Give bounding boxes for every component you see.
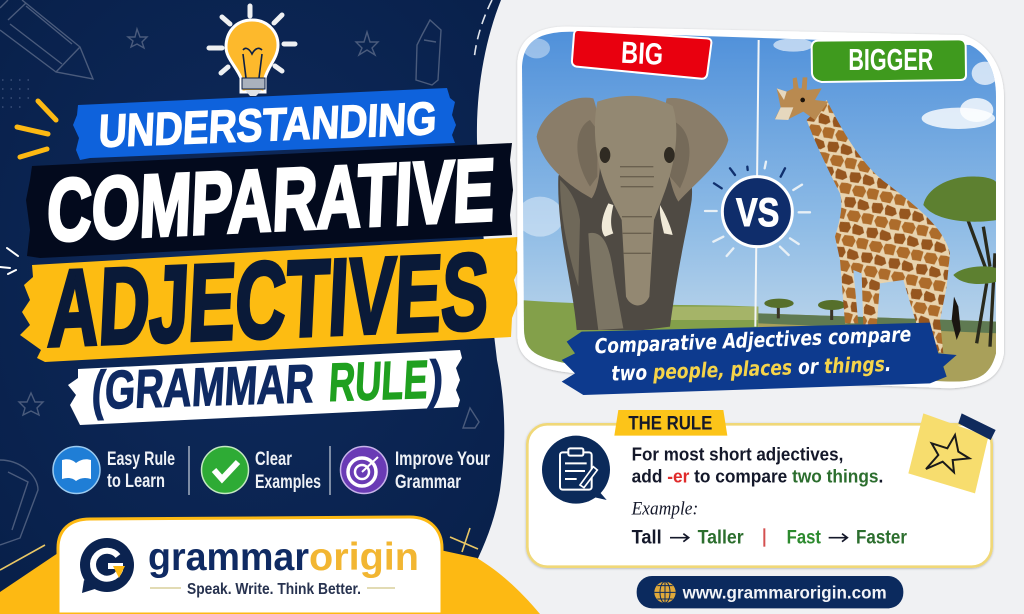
white spark marks — [0, 248, 18, 274]
heading banner: grammar rule: ) — [426, 349, 446, 410]
ground left — [524, 300, 758, 363]
feature: clear examples — [202, 446, 321, 494]
example words: Faster — [856, 527, 907, 548]
navy left panel — [0, 0, 504, 614]
feature: clear examples: Clear — [255, 449, 292, 470]
feature: improve your grammar: Grammar — [395, 472, 461, 493]
yellow bottom wave — [0, 550, 540, 614]
feature: improve your grammar — [340, 446, 490, 494]
elephant — [537, 96, 728, 330]
caption banner — [562, 322, 957, 395]
lightbulb icon — [209, 6, 295, 96]
brand name: grammar — [148, 536, 309, 579]
rule box — [527, 424, 992, 567]
sky — [520, 30, 1000, 387]
big tag — [572, 30, 711, 79]
website pill: www.grammarorigin.com — [682, 582, 887, 602]
rule panel — [527, 410, 996, 608]
divider — [189, 446, 330, 495]
heading banner: grammar rule: (GRAMMAR — [90, 354, 316, 421]
feature: improve your grammar: Improve Your — [395, 449, 490, 470]
clipboard icon — [542, 436, 610, 504]
sticky note — [908, 413, 996, 493]
example words: Tall — [632, 527, 662, 548]
feature: easy rule to learn: Easy Rule — [107, 449, 175, 470]
feature: easy rule to learn: to Learn — [107, 471, 165, 492]
bigger tag — [812, 39, 966, 82]
photo comparison panel — [517, 27, 1004, 395]
rule tag — [614, 410, 727, 436]
feature: easy rule to learn — [53, 446, 175, 494]
heading banner: adjectives — [20, 230, 522, 369]
heading banner: understanding: UNDERSTANDING — [98, 92, 438, 157]
website pill — [637, 576, 903, 608]
caption banner: two people, places or things. — [611, 352, 892, 386]
acacia trees — [923, 177, 997, 347]
example words — [632, 527, 907, 548]
tagline: Speak. Write. Think Better. — [187, 581, 361, 598]
feature: clear examples: Examples — [255, 472, 321, 493]
dotted grid doodle — [2, 80, 36, 107]
doodles: pencils and stars — [0, 0, 479, 545]
vs divider rays — [705, 162, 810, 256]
example label: Example: — [631, 498, 698, 519]
dashed curve doodle — [474, 0, 492, 60]
vs badge — [722, 177, 792, 247]
rule text: For most short adjectives, — [632, 444, 843, 465]
logo card: origin — [309, 536, 419, 579]
heading banner: comparative — [26, 140, 513, 260]
big tag: BIG — [620, 36, 664, 72]
caption banner: Comparative Adjectives compare — [594, 322, 912, 358]
photo frame — [517, 27, 1004, 388]
small trees — [764, 299, 846, 320]
giraffe — [775, 77, 961, 353]
divider — [755, 40, 759, 327]
ground right — [758, 313, 997, 383]
vs badge: VS — [736, 191, 779, 235]
bigger tag: BIGGER — [848, 43, 933, 77]
yellow spark marks — [17, 101, 56, 157]
rule text: add -er to compare two things. — [632, 465, 883, 486]
heading banner: adjectives: ADJECTIVES — [46, 230, 491, 369]
dashed line and cross — [0, 528, 478, 570]
clouds — [517, 38, 998, 237]
rule tag: THE RULE — [628, 414, 712, 435]
heading banner: grammar rule: RULE — [327, 350, 430, 413]
example words: Fast — [787, 527, 821, 548]
example words: Taller — [698, 527, 744, 548]
rule text — [632, 444, 883, 486]
logo card — [58, 517, 442, 614]
heading banner: comparative: COMPARATIVE — [45, 140, 497, 260]
logo mark — [80, 538, 134, 593]
